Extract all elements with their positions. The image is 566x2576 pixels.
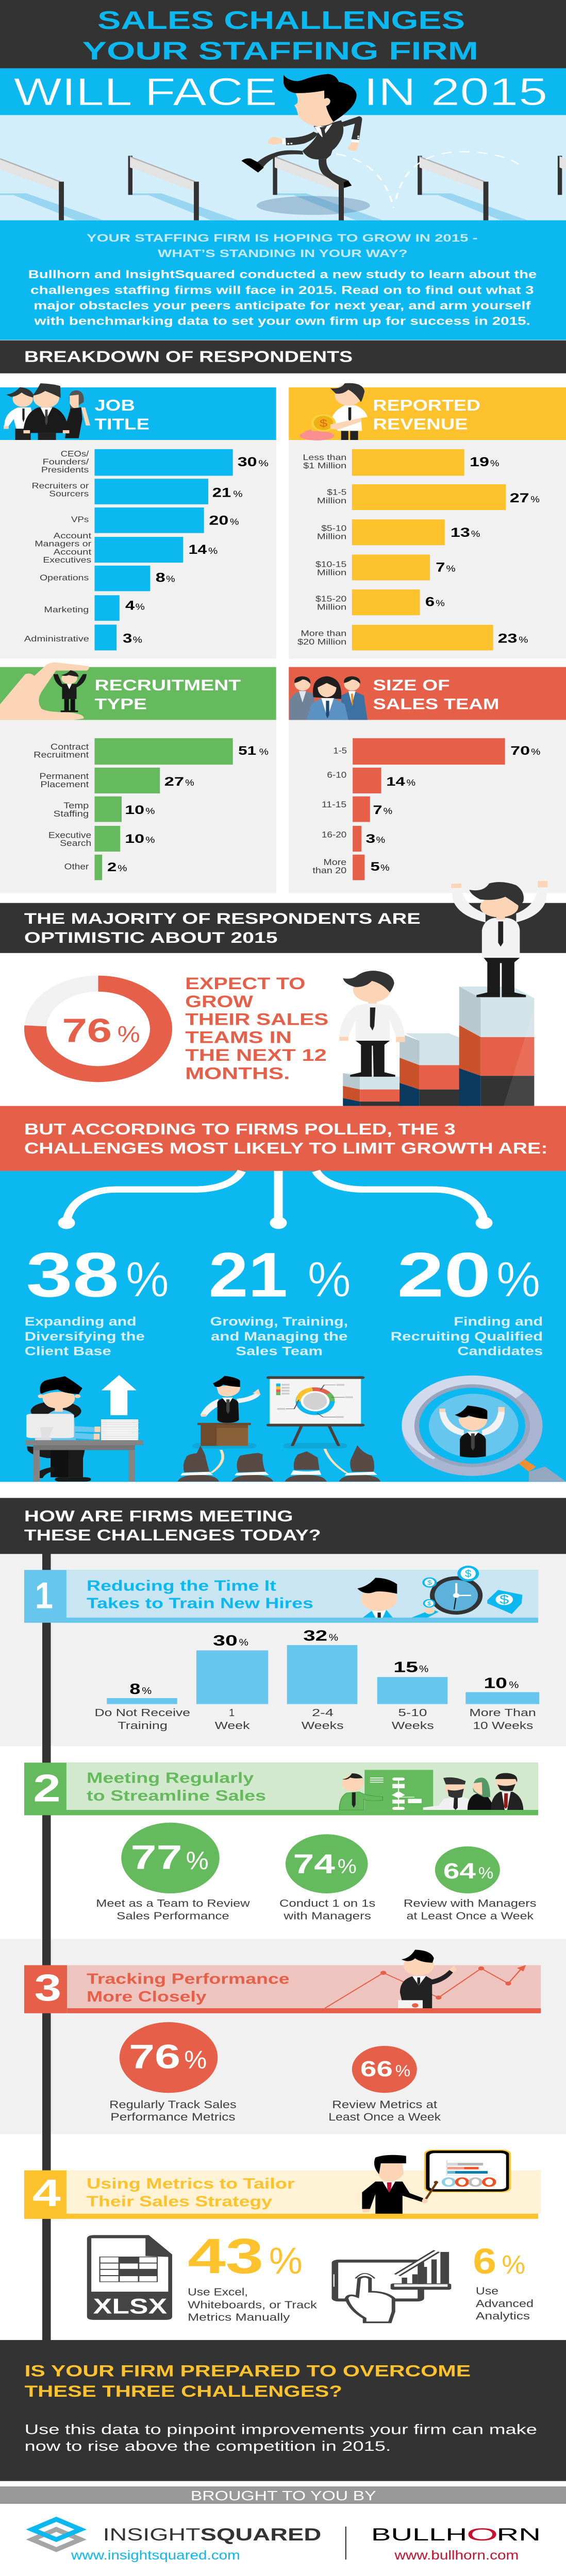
bar: 1-5 million 27%	[317, 484, 540, 510]
stat: 77% meet as team: Sales Performance	[116, 1910, 229, 1922]
bar: recruiters 21%: Sourcers	[49, 489, 89, 498]
stat: 43% use excel: Use Excel,	[188, 2286, 248, 2298]
stat: 66% review weekly: %	[395, 2062, 410, 2080]
panel: reported revenue	[289, 383, 566, 659]
bar: more than 20 5%: More	[323, 858, 346, 867]
bar: CEOs 30%: Founders/	[43, 457, 89, 466]
intro text: YOUR STAFFING FIRM IS HOPING TO GROW IN 2015 -	[87, 232, 477, 244]
text: review metrics: Review Metrics at	[332, 2098, 437, 2111]
card 3: tracking performance: 3	[35, 1967, 61, 2009]
label: expect to grow	[185, 974, 328, 1083]
bar: VPs 20%	[71, 507, 239, 533]
bar: 11-15 7%: 7	[373, 803, 382, 817]
bar: 1-5 million 27%: $1-5	[327, 487, 346, 497]
bar: account managers 14%: %	[208, 546, 218, 556]
bar: temp staffing 10%: Temp	[63, 801, 89, 810]
banner: brought to you by: BROUGHT TO YOU BY	[191, 2488, 376, 2503]
stat: 43% use excel: Whiteboards, or Track	[188, 2299, 317, 2311]
bar: more than 10 weeks 10%: More Than	[469, 1706, 536, 1718]
bar: 1-5 70%: 70	[510, 744, 530, 758]
bar: operations 8%: %	[166, 574, 175, 584]
icon: man with clock and money: $	[427, 1579, 432, 1586]
stat: 64% review weekly: %	[478, 1864, 493, 1882]
stat: 64% review weekly: 64	[443, 1859, 476, 1884]
bar: 1 week 30%: %	[239, 1637, 248, 1648]
bar: less than 1 million 19%: Less than	[303, 452, 346, 462]
stat: 38%: Expanding and	[25, 1315, 137, 1329]
heading: recruitment type	[94, 677, 241, 713]
heading: size of sales team	[373, 677, 499, 713]
stat: 21%: Growing, Training,	[210, 1315, 348, 1329]
section: how firms are meeting challenges	[0, 1498, 566, 2341]
bar: CEOs 30%: CEOs/	[61, 449, 89, 458]
logo: InsightSquared: INSIGHT	[103, 2525, 201, 2545]
bar: administrative 3%: %	[133, 635, 142, 645]
bar: account managers 14%: Executives	[43, 555, 91, 565]
bar: temp staffing 10%: 10	[125, 803, 144, 817]
stat: 38%: %	[126, 1252, 169, 1307]
bar: 5-10 weeks 15%: Weeks	[392, 1719, 434, 1731]
connector lines	[58, 1171, 493, 1229]
section: hero	[0, 0, 566, 340]
icon: tablet with analytics	[334, 2251, 451, 2323]
stat: 43% use excel: Metrics Manually	[188, 2311, 290, 2323]
bar: VPs 20%: %	[230, 517, 239, 527]
heading: breakdown of respondents: BREAKDOWN OF RESPONDENTS	[24, 348, 353, 365]
icon: man with clock and money: $	[500, 1593, 509, 1607]
stat: 43% use excel	[188, 2228, 317, 2323]
text: review metrics: Least Once a Week	[328, 2111, 441, 2123]
stat: 6% advanced analytics: Analytics	[476, 2310, 530, 2322]
label: expect to grow: TEAMS IN	[185, 1028, 292, 1047]
heading: job title	[94, 397, 149, 433]
bar: 15-20 million 6%: $15-20	[315, 594, 346, 603]
chart: 76% donut: %	[118, 1022, 140, 1047]
title: WILL FACE	[14, 71, 277, 114]
bar: 6-10 14%: 6-10	[327, 771, 346, 779]
card 2: meeting regularly: Meeting Regularly	[87, 1770, 254, 1786]
stat: 6% advanced analytics: %	[502, 2250, 525, 2279]
bar: more than 20 5%: 5	[370, 860, 380, 874]
title: SALES CHALLENGES	[97, 6, 465, 34]
hurdles	[0, 156, 566, 221]
bar: 1 week 30%: 30	[213, 1632, 238, 1649]
stat: 38%: Diversifying the	[25, 1330, 145, 1344]
icon: three executives	[4, 383, 90, 440]
bar: contract recruitment 51%: Contract	[51, 742, 89, 752]
icon: jumping businessman	[241, 74, 362, 188]
bar: VPs 20%: VPs	[71, 515, 89, 524]
stat: 6% advanced analytics	[473, 2241, 534, 2322]
icon: presenter with audience	[178, 1376, 380, 1482]
bar: marketing 4%: Marketing	[44, 605, 89, 614]
section: breakdown of respondents, second row	[0, 663, 566, 893]
label: expect to grow: THEIR SALES	[185, 1010, 328, 1029]
bar: 15-20 million 6%: 6	[425, 595, 435, 609]
intro text: WHAT’S STANDING IN YOUR WAY?	[158, 247, 408, 260]
bar: 10-15 million 7%: 7	[436, 561, 445, 574]
bar: permanent placement 27%: 27	[164, 775, 184, 788]
icon: team at flowchart board	[339, 1770, 523, 1810]
title	[14, 6, 547, 114]
bar: other 2%: 2	[107, 860, 116, 874]
bar: more than 20 million 23%	[297, 625, 528, 650]
bar: temp staffing 10%	[54, 796, 155, 822]
bar: more than 10 weeks 10%: %	[509, 1680, 519, 1690]
stat: 76% track metrics	[120, 2022, 218, 2093]
bar: do not receive training 8%	[94, 1681, 190, 1731]
logo: Bullhorn: BULLH	[371, 2525, 467, 2545]
panel: recruitment type	[0, 663, 276, 893]
icon: man with piggy bank	[299, 383, 368, 440]
bar: more than 20 5%: %	[380, 863, 390, 873]
bar: 11-15 7%	[322, 796, 392, 822]
stat: 21%	[209, 1240, 351, 1358]
bar: 2-4 weeks 32%: 2-4	[312, 1706, 334, 1718]
bar: 1 week 30%	[196, 1632, 268, 1731]
bar: less than 1 million 19%: 19	[470, 455, 489, 469]
bar: 16-20 3%: 3	[365, 832, 375, 846]
card 3: tracking performance: Tracking Performance	[87, 1971, 290, 1987]
stat: 64% review weekly	[404, 1846, 537, 1922]
stat: 74% one on ones: Conduct 1 on 1s	[279, 1897, 375, 1909]
heading: recruitment type: RECRUITMENT	[94, 677, 241, 694]
icon: man on first step	[339, 971, 405, 1077]
chart: 76% donut: 76	[62, 1012, 112, 1049]
bar: 5-10 weeks 15%: %	[419, 1664, 428, 1674]
bar: 5-10 million 13%: Million	[317, 532, 346, 541]
bar: 1-5 70%: %	[531, 747, 540, 757]
icon: magnifying glass over candidate	[402, 1376, 566, 1482]
banner: three challenges	[0, 1106, 566, 1171]
bar: executive search 10%: Search	[60, 839, 91, 848]
bar: 15-20 million 6%	[315, 589, 445, 615]
bar: 1-5 million 27%: Million	[317, 496, 346, 505]
bar: permanent placement 27%: Placement	[40, 780, 89, 789]
bar: administrative 3%	[24, 624, 142, 650]
panel: size of sales team	[289, 667, 566, 893]
bar: 2-4 weeks 32%	[287, 1628, 357, 1731]
bar: recruiters 21%: %	[233, 489, 243, 499]
bar: VPs 20%: 20	[209, 514, 228, 528]
bar: account managers 14%: Account	[54, 531, 91, 540]
bar: marketing 4%: %	[136, 602, 145, 612]
bar: more than 10 weeks 10%	[465, 1675, 539, 1731]
bar: more than 10 weeks 10%: 10	[484, 1675, 507, 1691]
bar: permanent placement 27%: %	[185, 777, 194, 788]
bar: 5-10 million 13%: 13	[451, 526, 470, 540]
stat: 74% one on ones: 74	[293, 1849, 335, 1879]
label: expect to grow: EXPECT TO	[185, 974, 305, 993]
bar: 1 week 30%: Week	[215, 1719, 250, 1731]
bar: operations 8%: 8	[156, 571, 165, 585]
section: breakdown of respondents, top row	[0, 341, 566, 659]
bar: more than 20 5%	[312, 855, 390, 880]
bar: 16-20 3%: 16-20	[322, 831, 346, 839]
bar: less than 1 million 19%: %	[490, 459, 499, 468]
text: regularly track: Regularly Track Sales	[109, 2098, 237, 2111]
card 2: meeting regularly	[24, 1762, 538, 1815]
bar: account managers 14%: Account	[54, 547, 91, 556]
title: YOUR STAFFING FIRM	[82, 37, 478, 65]
stat: 38%: 38	[26, 1240, 119, 1310]
card 4: using metrics: 4	[32, 2172, 61, 2214]
bar: 1-5 70%: 1-5	[333, 747, 347, 755]
bar: other 2%	[64, 855, 127, 880]
bar: do not receive training 8%: Do Not Receive	[94, 1706, 190, 1718]
card 3: tracking performance: More Closely	[87, 1989, 207, 2005]
bar: 10-15 million 7%: %	[446, 564, 456, 574]
heading: job title: TITLE	[94, 415, 149, 433]
icon: sales team of three	[290, 676, 368, 720]
card 1: reducing training time: Reducing the Time It	[87, 1577, 276, 1594]
stat: 38%	[25, 1240, 169, 1358]
heading: how are firms meeting: THESE CHALLENGES TODAY?	[24, 1527, 321, 1544]
bar: administrative 3%: Administrative	[24, 634, 89, 643]
bar: marketing 4%: 4	[125, 599, 135, 613]
bar: 11-15 7%: 11-15	[322, 800, 346, 809]
bar: CEOs 30%: 30	[238, 455, 257, 469]
bar: permanent placement 27%: Permanent	[39, 772, 89, 781]
bar: 2-4 weeks 32%: 32	[303, 1628, 327, 1644]
stat: 20%	[391, 1240, 543, 1358]
stat: 74% one on ones: with Managers	[284, 1910, 371, 1922]
bar: 6-10 14%	[327, 768, 415, 793]
heading: reported revenue: REPORTED	[373, 397, 480, 414]
icon: man with clock and money: $	[427, 1601, 431, 1607]
bar: CEOs 30%	[41, 449, 269, 476]
bar: 1 week 30%: 1	[229, 1706, 235, 1718]
bar: account managers 14%: Managers or	[35, 539, 91, 548]
card 2: meeting regularly: 2	[33, 1767, 61, 1810]
bar: 10-15 million 7%: Million	[317, 568, 346, 577]
section: top challenges	[0, 1171, 566, 1482]
bar: contract recruitment 51%: Recruitment	[34, 751, 89, 759]
section: optimism	[0, 881, 566, 1171]
stat: 20%: 20	[397, 1240, 491, 1310]
bar: 5-10 million 13%	[317, 519, 480, 545]
heading: majority optimistic	[24, 910, 421, 946]
bar: do not receive training 8%: 8	[129, 1681, 140, 1697]
card 1: reducing training time	[24, 1566, 538, 1623]
stat: 77% meet as team: %	[186, 1847, 209, 1875]
icon: man with clock and money: $	[465, 1568, 472, 1580]
bar: contract recruitment 51%: 51	[238, 744, 256, 758]
icon: man with clock and money	[357, 1566, 522, 1618]
heading: reported revenue: REVENUE	[373, 415, 468, 433]
card 1: reducing training time: 1	[35, 1575, 53, 1616]
logo: Bullhorn: O	[467, 2525, 498, 2545]
chart: rising steps	[343, 987, 534, 1106]
bar: 5-10 weeks 15%: 5-10	[398, 1706, 427, 1718]
bar: recruiters 21%: 21	[212, 486, 231, 500]
stat: 21%: %	[308, 1252, 351, 1307]
logo: InsightSquared: www.insightsquared.com	[71, 2548, 240, 2563]
bar: operations 8%: Operations	[40, 573, 89, 582]
bar: executive search 10%	[48, 826, 155, 852]
bar: CEOs 30%: Presidents	[41, 465, 89, 474]
bar: do not receive training 8%: %	[142, 1686, 152, 1696]
panel: closing call to action	[0, 2340, 566, 2481]
bar: executive search 10%: %	[145, 835, 155, 845]
bar: 11-15 7%: %	[384, 806, 392, 816]
bar: more than 20 5%: than 20	[312, 866, 346, 875]
stat: 74% one on ones	[279, 1834, 375, 1922]
intro text	[28, 232, 537, 328]
heading: job title: JOB	[94, 397, 135, 414]
heading: reported revenue	[373, 397, 480, 433]
label: expect to grow: GROW	[185, 992, 253, 1011]
shadow and jump path	[257, 151, 523, 215]
bar: 16-20 3%	[322, 826, 385, 852]
bar: less than 1 million 19%	[303, 449, 499, 476]
stat: 74% one on ones: %	[338, 1856, 357, 1878]
icon: xlsx file: XLSX	[93, 2294, 167, 2318]
logo: Bullhorn: RN	[497, 2525, 541, 2545]
icon: hand holding small man	[0, 663, 89, 720]
bar: 16-20 3%: %	[376, 835, 385, 845]
text: regularly track	[109, 2098, 237, 2123]
icon: presenter with tablet	[362, 2149, 511, 2214]
bar: executive search 10%: Executive	[48, 831, 91, 840]
logo: Bullhorn	[371, 2525, 541, 2563]
bar: temp staffing 10%: %	[145, 806, 155, 816]
bar: 6-10 14%: %	[406, 777, 415, 788]
bar: 15-20 million 6%: %	[436, 598, 445, 608]
heading: how are firms meeting: HOW ARE FIRMS MEETING	[24, 1507, 293, 1525]
stat: 43% use excel: 43	[188, 2228, 263, 2284]
card 3: tracking performance	[24, 1950, 541, 2013]
icon: man with performance chart	[325, 1950, 526, 2008]
card 1: reducing training time: Takes to Train New Hires	[87, 1595, 313, 1612]
bar: account managers 14%: 14	[189, 543, 207, 557]
text: regularly track: Performance Metrics	[110, 2111, 236, 2123]
stat: 77% meet as team: 77	[130, 1839, 182, 1876]
icon: man with piggy bank: $	[320, 417, 327, 429]
bar: 2-4 weeks 32%: Weeks	[302, 1719, 344, 1731]
bar: recruiters 21%: Recruiters or	[32, 481, 89, 490]
timeline line	[42, 1554, 51, 2341]
stat: 77% meet as team: Meet as a Team to Review	[96, 1897, 250, 1909]
card 4: using metrics	[24, 2149, 541, 2219]
stat: 76% track metrics: %	[184, 2046, 207, 2074]
bar: executive search 10%: 10	[125, 832, 144, 846]
bar: more than 20 million 23%: %	[519, 635, 528, 645]
stat: 66% review weekly: 66	[360, 2057, 393, 2081]
stat: 21%: Sales Team	[236, 1345, 323, 1358]
stat: 21%: 21	[209, 1240, 288, 1310]
bar: 5-10 million 13%: $5-10	[321, 523, 346, 533]
stat: 38%: Client Base	[25, 1345, 111, 1358]
bar: temp staffing 10%: Staffing	[54, 809, 89, 819]
icon: man on top step	[451, 881, 547, 997]
icon: man at desk with rising paperwork	[25, 1375, 143, 1482]
bar: contract recruitment 51%	[34, 738, 269, 765]
card 4: using metrics: Their Sales Strategy	[87, 2193, 272, 2210]
icon: xlsx file	[87, 2235, 172, 2320]
label: expect to grow: THE NEXT 12	[185, 1046, 327, 1065]
bar: do not receive training 8%: Training	[118, 1719, 168, 1731]
card 2: meeting regularly: to Streamline Sales	[87, 1787, 266, 1804]
bar: more than 20 million 23%: 23	[498, 632, 517, 646]
bar: 5-10 million 13%: %	[471, 529, 480, 539]
stat: 6% advanced analytics: 6	[473, 2241, 496, 2281]
bar: 5-10 weeks 15%: 15	[393, 1659, 418, 1675]
bar: operations 8%	[40, 566, 175, 591]
card 4: using metrics: Using Metrics to Tailor	[87, 2176, 294, 2192]
logo: InsightSquared	[26, 2517, 321, 2563]
bar: CEOs 30%: %	[258, 459, 269, 468]
bar: more than 20 million 23%: $20 Million	[297, 637, 346, 646]
bar: more than 10 weeks 10%: 10 Weeks	[473, 1719, 533, 1731]
bar: other 2%: %	[118, 863, 127, 873]
panel: job title	[0, 383, 276, 659]
section: closing and sponsors	[0, 2340, 566, 2563]
bar: 6-10 14%: 14	[386, 775, 405, 788]
stat: 77% meet as team	[96, 1823, 250, 1922]
bar: less than 1 million 19%: $1 Million	[303, 461, 346, 470]
text: review metrics	[328, 2098, 441, 2123]
heading: how are firms meeting	[0, 1498, 566, 1554]
bar: marketing 4%	[44, 595, 145, 621]
bar: 5-10 weeks 15%	[377, 1659, 447, 1731]
bar: 1-5 million 27%: %	[530, 495, 540, 504]
label: expect to grow: MONTHS.	[185, 1064, 290, 1083]
heading: size of sales team: SIZE OF	[373, 677, 450, 694]
stat: 6% advanced analytics: Use	[476, 2285, 498, 2297]
stat: 43% use excel: %	[269, 2240, 303, 2281]
bar: account managers 14%	[35, 531, 218, 565]
stat: 66% review weekly	[352, 2046, 417, 2093]
bar: recruiters 21%	[32, 479, 243, 504]
bar: permanent placement 27%	[39, 768, 194, 793]
bar: other 2%: Other	[64, 862, 89, 871]
bar: contract recruitment 51%: %	[259, 747, 269, 757]
bar: 1-5 70%	[333, 738, 540, 765]
chart: training time bars	[94, 1628, 539, 1731]
heading: majority optimistic: OPTIMISTIC ABOUT 2015	[24, 929, 277, 946]
bar: 1-5 million 27%: 27	[510, 492, 529, 505]
bar: 15-20 million 6%: Million	[317, 602, 346, 612]
chart: 76% donut	[35, 984, 161, 1074]
logo: InsightSquared: SQUARED	[201, 2525, 321, 2545]
bar: 10-15 million 7%	[315, 554, 456, 580]
bar: more than 20 million 23%: More than	[301, 629, 346, 638]
stat: 21%: and Managing the	[211, 1330, 347, 1344]
bar: administrative 3%: 3	[123, 632, 132, 646]
banner: brought to you by	[0, 2486, 566, 2503]
bar: 10-15 million 7%: $10-15	[315, 560, 346, 569]
bar: 2-4 weeks 32%: %	[329, 1633, 338, 1643]
heading: recruitment type: TYPE	[94, 696, 147, 713]
stat: 76% track metrics: 76	[129, 2038, 180, 2076]
